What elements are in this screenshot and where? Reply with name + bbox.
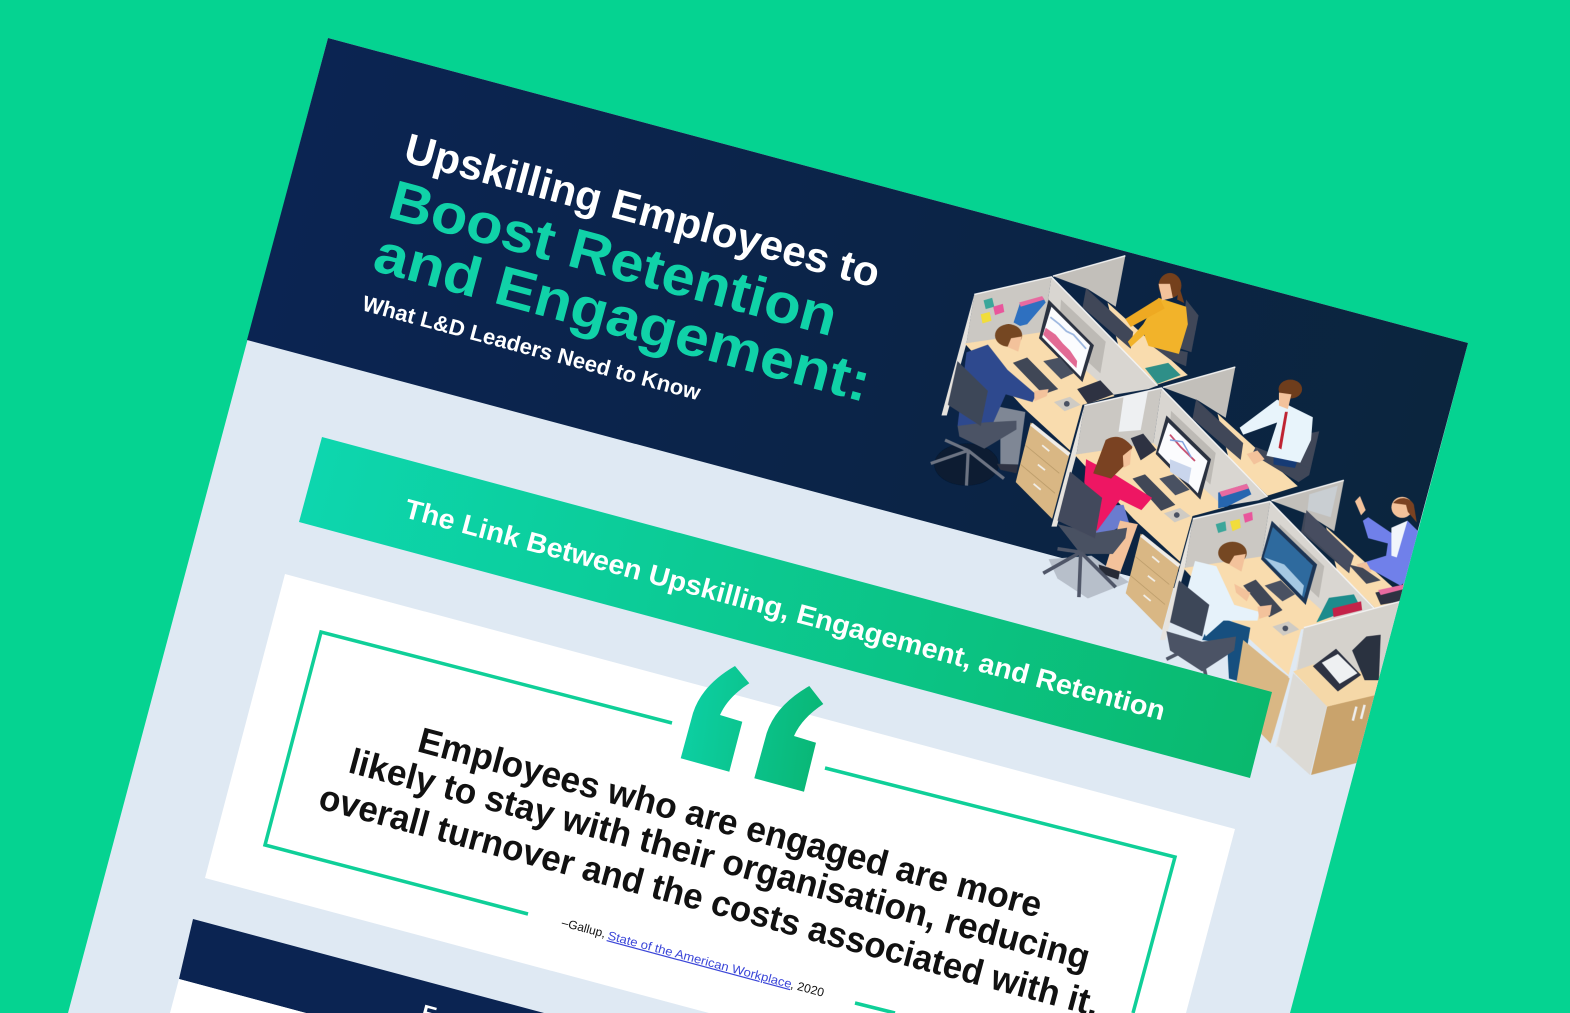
title line 2: Boost Retention bbox=[383, 168, 844, 348]
quote text: Employees who are engaged are more bbox=[414, 719, 1047, 925]
next section bar bbox=[179, 919, 544, 1013]
monitor and desk items, row 3 bbox=[1216, 486, 1362, 622]
row 2 cubicle bbox=[1051, 367, 1298, 630]
banner background bbox=[299, 437, 1272, 778]
citation bbox=[560, 915, 826, 1000]
row 3 cubicle bbox=[1160, 480, 1406, 743]
person: woman in yellow bbox=[1125, 273, 1199, 366]
header panel bbox=[247, 38, 1468, 645]
icon: quotation marks bbox=[681, 666, 823, 792]
citation: State of the American Workplace bbox=[606, 928, 794, 991]
end cabinet with printer bbox=[1234, 601, 1400, 775]
section banner bbox=[299, 437, 1272, 778]
person: man in blue jacket bbox=[931, 324, 1049, 486]
quote frame bbox=[265, 632, 1175, 1013]
title line 3: and Engagement: bbox=[368, 221, 878, 414]
row 1 cubicle bbox=[941, 256, 1188, 519]
banner heading: The Link Between Upskilling, Engagement, and Retention bbox=[401, 493, 1169, 726]
next section card bbox=[170, 979, 306, 1013]
panel: quote card bbox=[205, 574, 1235, 1013]
person: man with red tie bbox=[1240, 380, 1319, 482]
person: man in white shirt bbox=[1166, 542, 1272, 682]
illustration: isometric office cubicles bbox=[931, 256, 1418, 775]
quote text: likely to stay with their organisation, reducing bbox=[345, 740, 1094, 978]
subtitle: What L&D Leaders Need to Know bbox=[360, 291, 704, 405]
citation: –Gallup, bbox=[560, 915, 607, 941]
title bbox=[360, 124, 885, 414]
person: woman in pink bbox=[1043, 437, 1152, 599]
citation: , 2020 bbox=[789, 977, 826, 1000]
monitor and desk items, row 2 bbox=[1131, 415, 1251, 511]
person: woman in purple bbox=[1304, 496, 1418, 605]
title line 1: Upskilling Employees to bbox=[400, 124, 885, 297]
